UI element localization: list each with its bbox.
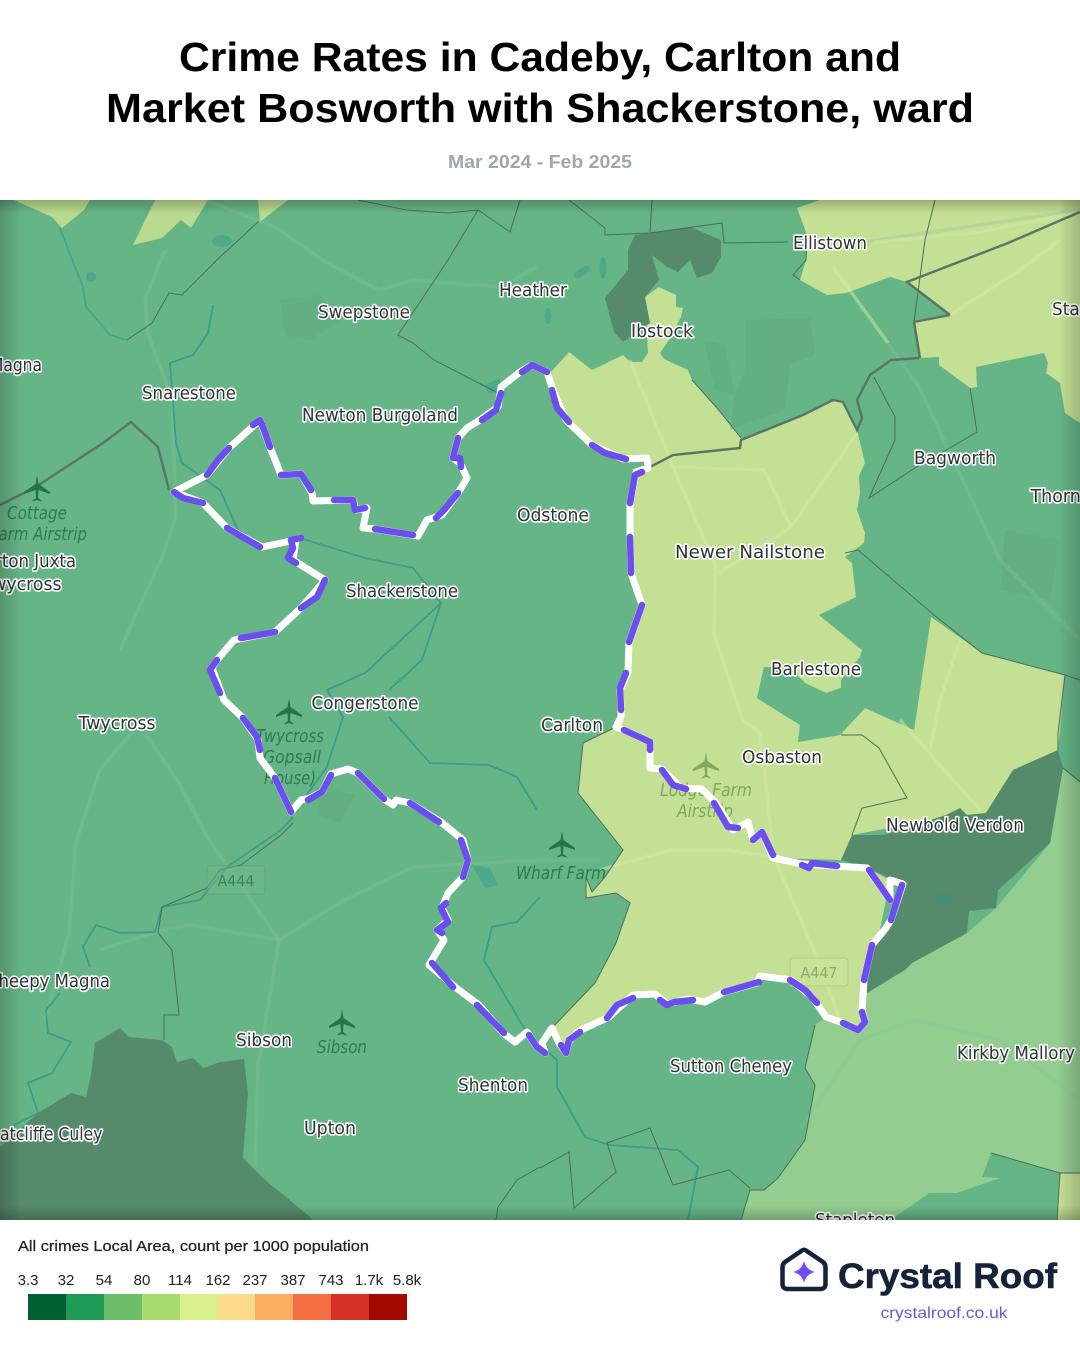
place labels: Newbold Verdon [886,815,1024,836]
place labels: Carlton [541,715,603,736]
subtitle: date range: Mar 2024 - Feb 2025 [448,152,632,172]
place labels: Barlestone [771,659,861,680]
title: Crime Rates in Cadeby, Carlton and [179,34,901,80]
website link text: crystalroof.co.uk [880,1305,1009,1322]
roads [45,200,1080,1167]
legend scale values: 5.8k [393,1272,422,1289]
place labels: Newer Nailstone [675,542,825,563]
place labels: Twycross [78,713,156,734]
airfield labels: Airstrip [676,801,733,822]
area: dark Newbold Verdon patch [841,750,1063,993]
water bodies [86,235,952,904]
airfield labels: Sibson [317,1037,367,1058]
place labels: Congerstone [312,693,418,714]
area: mid green south-east [741,768,1080,1220]
airfield labels: Twycross [256,726,324,747]
area: pale bottom-right corner [1057,1173,1080,1220]
legend scale values: 32 [58,1272,74,1289]
place labels: Heather [499,280,568,301]
place labels: Ibstock [631,321,694,342]
boundary lines [0,200,1080,1220]
legend scale values: 3.3 [18,1272,38,1289]
legend scale values: 237 [242,1272,268,1289]
boundary white base [174,365,903,1053]
place labels: Swepstone [318,302,410,323]
road shield: A447 [790,958,848,986]
place labels: Ellistown [793,233,867,254]
place labels: Osbaston [742,747,822,768]
legend colour bar [28,1294,407,1320]
map edge shading [0,200,1080,1220]
road shield: A447: A447 [800,964,838,982]
place labels: Sutton Cheney [670,1056,792,1077]
area: pale Newer Nailstone [616,400,1065,860]
area: dark south-west patch [0,1028,312,1220]
area: green Barlestone wedge [757,550,931,742]
airfield icons [24,475,719,1036]
legend scale values: 387 [280,1272,306,1289]
road shield: A444 [207,866,265,894]
legend scale values: 54 [96,1272,112,1289]
boundary purple dashes [174,365,902,1053]
place labels: Shackerstone [346,581,458,602]
place labels: Odstone [517,505,589,526]
airfield labels: Wharf Farm [516,863,606,884]
logo wordmark: Crystal Roof [838,1257,1057,1296]
airfield labels: House) [264,768,316,789]
ward boundary: dashed white and purple [174,365,903,1053]
road shield: A444: A444 [218,872,254,890]
area: pale south of ward [552,727,890,1053]
legend scale values: 1.7k [355,1272,384,1289]
legend scale values [18,1272,422,1289]
legend title: All crimes Local Area, count per 1000 population [18,1238,369,1255]
title: Market Bosworth with Shackerstone, ward [106,85,974,131]
legend scale values: 80 [134,1272,150,1289]
place labels: Bagworth [914,448,996,469]
legend scale values: 162 [205,1272,231,1289]
place labels: Sibson [236,1030,292,1051]
place labels: Upton [304,1118,356,1139]
area: pale top-left fragments [14,200,288,245]
place labels: Newton Burgoland [302,405,458,426]
legend scale values: 743 [318,1272,344,1289]
woodland patches [730,426,733,430]
airfield labels: Gopsall [263,747,321,768]
rivers [14,228,698,1220]
legend scale values: 114 [168,1272,192,1289]
place labels [0,233,1080,1231]
airfield labels: Cottage [7,503,67,524]
icon: house with star [782,1250,826,1289]
place labels: Stapleton [815,1210,895,1231]
area: dark Ibstock patch [605,227,721,342]
area: pale north of ward [551,287,741,467]
title [106,34,974,131]
area: pale top-right [797,200,1080,423]
map panel [0,200,1080,1231]
logo: Crystal Roof [782,1250,1057,1296]
airfield labels [0,503,752,1058]
place labels: Snarestone [142,383,236,404]
airfield labels: Lodge Farm [660,780,752,801]
place labels: Shenton [458,1075,528,1096]
